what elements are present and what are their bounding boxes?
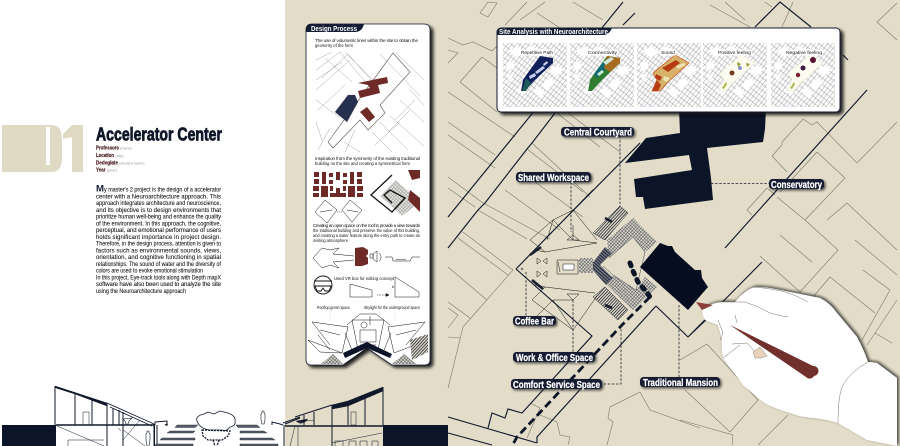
project metadata: (city): [116, 154, 124, 158]
body text: of the environment. In this approach, the cognitive,: [96, 221, 221, 227]
body text: colors are used to evoke emotional stimulation: [96, 269, 203, 275]
diagram: volume transformation: [350, 277, 419, 297]
body text: Therefore, in the design process, attention is given to: [96, 242, 222, 248]
body text: orientation, and cognitive functioning in spatial: [96, 255, 221, 261]
body text: approach integrates architecture and neuroscience,: [96, 201, 221, 207]
panel heading tab: Design Process: [311, 24, 357, 33]
body text: factors such as environmental sounds, views,: [96, 248, 221, 254]
building: conservatory: [625, 108, 766, 209]
site plan background lines: [448, 2, 897, 445]
body text: and its objective is to design environments that: [96, 208, 221, 214]
checker hatch courtyard: [605, 218, 657, 310]
project metadata: Location: [96, 153, 114, 159]
diagram: volume transformation: b: [392, 284, 395, 289]
diagram: symmetric plan: [313, 172, 363, 197]
body text: prioritize human well-being and enhance the quality: [96, 215, 221, 221]
thumbnail: Sound: Sound: [661, 50, 675, 55]
text: step 1: [315, 38, 418, 48]
icon: VR headset: [314, 276, 332, 294]
label: Comfort Service Space: Comfort Service Space: [513, 380, 600, 391]
text: step 2: building on the site and creating a symmetrical form: [315, 161, 410, 166]
striped terraces: [593, 206, 628, 320]
text: step 3: Creating an open space on the roof to provide a view towards: [313, 223, 421, 228]
thumbnail: Positive feeling: Positive feeling: [718, 50, 751, 55]
hatch block: [579, 258, 593, 273]
title: Accelerator Center: [96, 124, 222, 144]
thumbnail: Negative feeling: [771, 43, 835, 107]
text: step 2: [315, 156, 420, 166]
text: step 3: inviting atmosphere: [313, 238, 348, 243]
thumbnail: Positive feeling: [703, 43, 767, 107]
project metadata: (year): [107, 168, 118, 172]
project metadata: (student name): [119, 161, 145, 165]
panel heading tab: Site Analysis with Neuroarchitecture: [499, 29, 608, 36]
text: skylight: Skylight for the underground space: [364, 305, 420, 310]
panel: site analysis with neuroarchitecture: [497, 28, 840, 112]
label: Work and Office Space: Work & Office Space: [516, 353, 593, 364]
project metadata: Year: [96, 168, 106, 174]
project metadata: Dedeglate: [96, 160, 118, 166]
body text: [96, 184, 222, 295]
body text: M: [96, 184, 104, 194]
diagram: roof view and water feature: [313, 247, 420, 268]
entry path thick dashes: [512, 263, 650, 446]
diagram: diamonds with arrow: [315, 200, 362, 223]
building: traditional mansion: [640, 243, 708, 310]
black basement blocks: [2, 425, 448, 446]
thumbnail: Sound: [637, 43, 701, 107]
body text: perceptual, and emotional performance of users: [96, 228, 221, 234]
project metadata: Professors: [96, 146, 119, 152]
people: [123, 411, 265, 446]
body text: relationships. The sound of water and the diversity of: [96, 262, 221, 268]
leader lines: [526, 136, 769, 384]
building: accelerator center plan: [521, 206, 657, 330]
project metadata: [96, 146, 145, 174]
diagram: symmetric form plan: [371, 170, 420, 216]
diagram: perspective of the building: [308, 308, 428, 364]
courtyard terraces: [155, 425, 278, 446]
text: rooftop green space: Rooftop green space: [317, 305, 350, 310]
text: step 1: geometry of the form: [315, 43, 353, 48]
right building section: [285, 387, 383, 446]
section drawing: [2, 386, 448, 446]
thumbnail: Negative feeling: Negative feeling: [786, 50, 822, 55]
diagram: volumetric lines on site: [316, 52, 424, 152]
label: Central Courtyard: Central Courtyard: [564, 127, 632, 138]
icon: hand holding brush: [696, 287, 897, 446]
text: step 1: The use of volumetric lines within the site to obtain the: [315, 38, 418, 43]
text: step 3: [313, 223, 421, 243]
label: Conservatory: Conservatory: [771, 180, 822, 191]
panel: design process: [306, 24, 430, 365]
body text: y master's 2 project is the design of a accelerator: [104, 188, 221, 194]
central hall: [521, 210, 597, 330]
thumbnail: Repetitive Path: Repetitive Path: [521, 50, 553, 55]
text: step 2: Inspiration from the symmetry of the existing traditional: [315, 156, 420, 161]
navy chevron: [591, 247, 613, 285]
background: right beige page: [285, 0, 900, 446]
project metadata: (name): [120, 146, 133, 150]
body text: holds significant importance in project design.: [96, 235, 221, 241]
tree: [197, 411, 235, 446]
body text: center with a Neuroarchitecture approach. This: [96, 194, 221, 200]
courtyard outline: [603, 237, 645, 290]
body text: using the Neuroarchitecture approach: [96, 289, 186, 295]
panel: project introduction: [2, 124, 222, 295]
graphic: large number 01: [2, 125, 83, 172]
body text: In this project, Eye-track tools along with Depth mapX: [96, 276, 221, 282]
text: step 3: and creating a water feature along the entry path to create an: [313, 233, 420, 238]
label: Shared Workspace: Shared Workspace: [518, 173, 589, 184]
left building section: [55, 386, 300, 446]
thumbnail: Connectivity: [570, 43, 634, 107]
body text: software have also been used to analyze the site: [96, 282, 222, 288]
thumbnail: Connectivity: Connectivity: [588, 50, 618, 55]
label: Traditional Mansion: Traditional Mansion: [643, 378, 718, 389]
label: Coffee Bar: Coffee Bar: [515, 316, 554, 328]
small navy bars: [530, 218, 612, 308]
thumbnail: Repetitive Path: [503, 43, 567, 107]
text: step 3: the traditional building and preserve the value of this building,: [313, 228, 420, 233]
text: VR note: Used VR box for editing concept: [334, 276, 395, 281]
